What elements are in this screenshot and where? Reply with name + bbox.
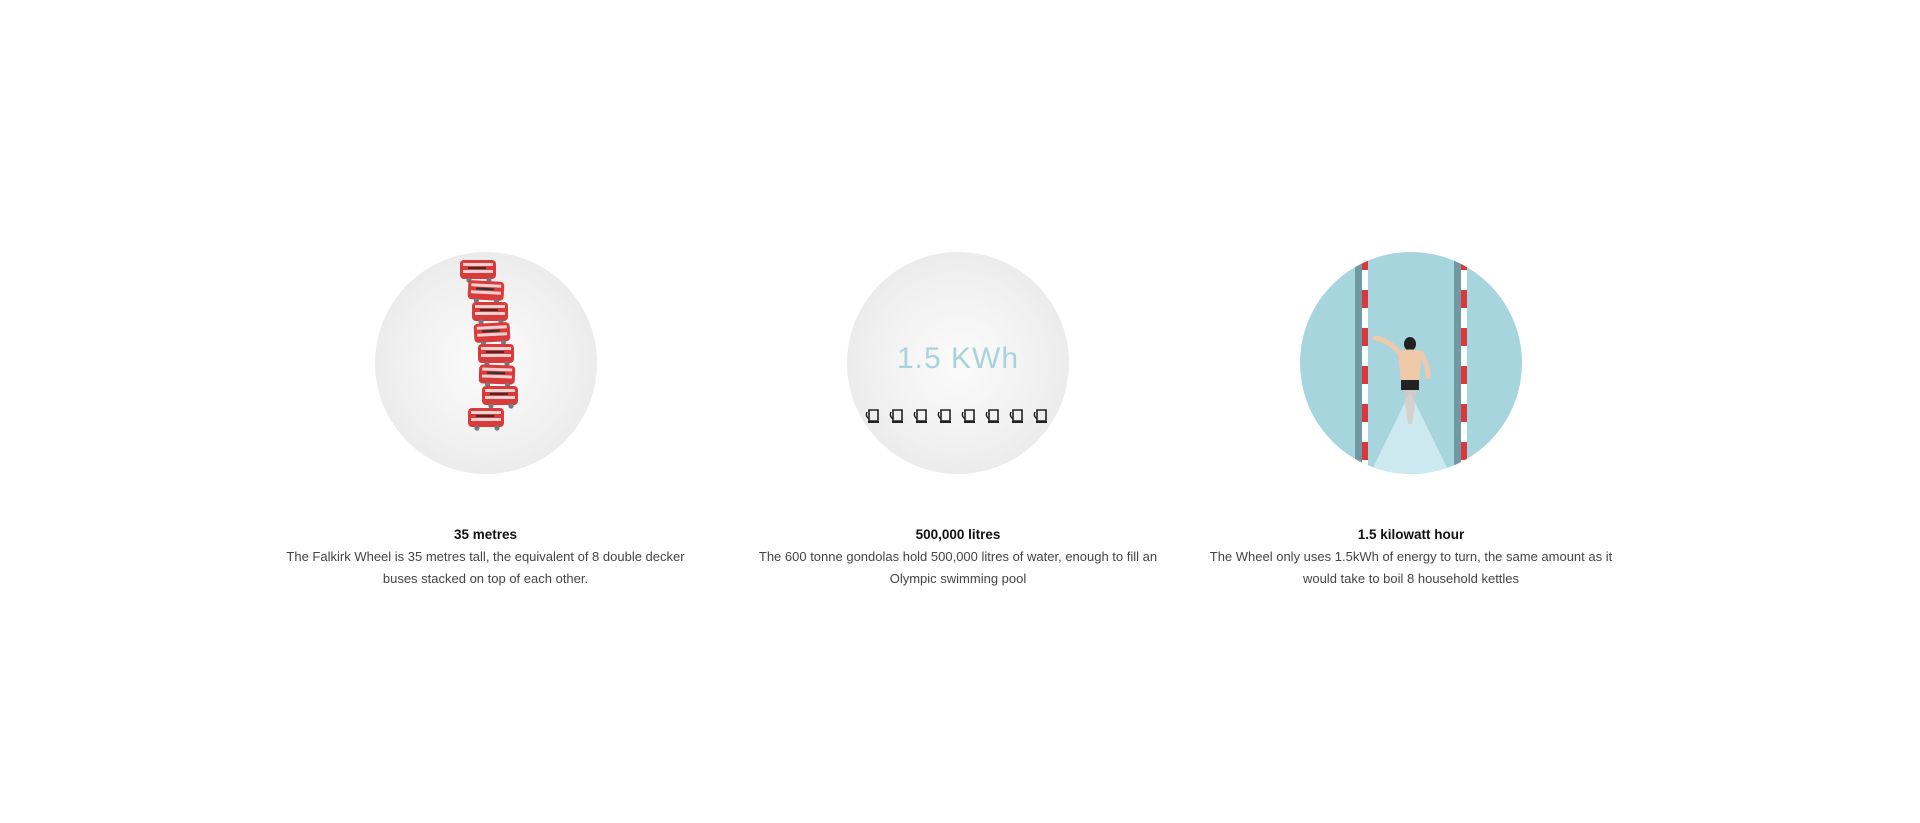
icon: pool lanes and swimmer xyxy=(1355,260,1467,474)
circle: swimmer xyxy=(1300,252,1522,474)
text: 1.5 KWh: 1.5 KWh xyxy=(897,342,1019,375)
caption: 35 metres xyxy=(286,527,685,586)
caption: 500,000 litres: 500,000 litres xyxy=(916,527,1000,542)
caption: 1.5 kilowatt hour: The Wheel only uses 1.5kWh of energy to turn, the same amount as it would take to boil 8 household kettles xyxy=(1210,549,1612,586)
circle: buses xyxy=(375,252,597,474)
icon: kettles row xyxy=(866,409,1047,423)
icon: stacked buses xyxy=(460,260,518,431)
caption: 1.5 kilowatt hour xyxy=(1210,527,1612,586)
caption: 35 metres: 35 metres xyxy=(454,527,517,542)
caption: 500,000 litres: The 600 tonne gondolas hold 500,000 litres of water, enough to fill an Olympic swimming pool xyxy=(759,549,1157,586)
caption: 35 metres: The Falkirk Wheel is 35 metres tall, the equivalent of 8 double decker buses stacked on top of each other. xyxy=(286,549,685,586)
caption: 500,000 litres xyxy=(759,527,1157,586)
circle: kettles xyxy=(847,252,1069,474)
caption: 1.5 kilowatt hour: 1.5 kilowatt hour xyxy=(1358,527,1464,542)
